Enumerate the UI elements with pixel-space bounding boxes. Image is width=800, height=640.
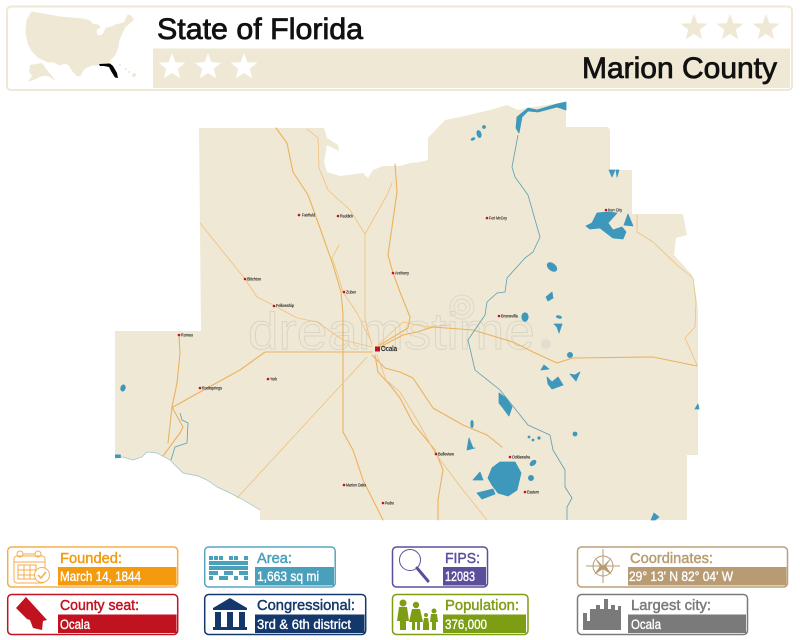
panel: Founded: Founded: bbox=[60, 550, 122, 567]
coastline edge bbox=[115, 452, 260, 510]
place markers and names: Bronsville bbox=[501, 314, 518, 318]
panel: County seat bbox=[8, 594, 178, 634]
title: State of Florida: State of Florida bbox=[157, 13, 363, 46]
place markers and names: Rocksprings bbox=[202, 386, 223, 390]
place markers and names: Kerr City bbox=[608, 208, 623, 212]
panel: County seat: Ocala bbox=[60, 617, 90, 632]
panel: Population bbox=[392, 594, 528, 634]
panel: Coordinates: 29° 13' N 82° 04' W bbox=[629, 569, 733, 584]
panel: Population: 376,000 bbox=[445, 617, 487, 632]
panel: Largest city: Ocala bbox=[631, 617, 661, 632]
place markers and names: Marion Oaks bbox=[346, 482, 367, 488]
panel: Congressional: Congressional: bbox=[257, 597, 355, 614]
map: Marion County bbox=[115, 102, 699, 520]
place markers and names: Fairfield bbox=[302, 212, 315, 218]
place markers and names: Fort McCoy bbox=[489, 216, 508, 220]
icon: district shape bbox=[16, 597, 47, 630]
icon: cream stars bbox=[681, 14, 779, 39]
watermark: dreamstime bbox=[248, 303, 535, 361]
place markers and names: Reddick bbox=[340, 214, 354, 218]
panel: FIPS: 12083 bbox=[445, 569, 475, 584]
panel: header banner bbox=[7, 6, 792, 90]
icon: white stars bbox=[159, 53, 257, 78]
place markers and names: Blitchton bbox=[247, 276, 261, 282]
icon: USA locator map bbox=[26, 12, 136, 82]
place markers and names: York bbox=[270, 376, 278, 382]
icon: city skyline bbox=[583, 599, 621, 630]
place markers and names: Pedro bbox=[385, 500, 394, 506]
panel: Area bbox=[205, 547, 335, 587]
place markers and names: Romeo bbox=[181, 332, 193, 338]
place markers and names: Ocklawaha bbox=[512, 454, 530, 460]
panel: Congressional: 3rd & 6th district bbox=[257, 617, 351, 632]
county land shape bbox=[115, 102, 698, 520]
panel: Largest city bbox=[578, 594, 748, 634]
place markers and names: Fellowship bbox=[276, 303, 294, 308]
panel: Area: Area: bbox=[257, 550, 292, 567]
panel: Founded: March 14, 1844 bbox=[60, 569, 141, 584]
panel: Population: Population: bbox=[445, 597, 519, 614]
panel: FIPS: FIPS: bbox=[445, 550, 480, 567]
county seat marker: Ocala: Ocala bbox=[381, 346, 397, 353]
panel: Congressional bbox=[205, 594, 366, 634]
place markers and names: Anthony bbox=[395, 270, 410, 276]
icon: government building bbox=[213, 598, 247, 630]
panel: Founded bbox=[8, 547, 178, 587]
panel: Coordinates bbox=[578, 547, 788, 587]
panel: Largest city: Largest city: bbox=[631, 597, 711, 614]
icon: family bbox=[397, 600, 438, 630]
panel: Area: 1,663 sq mi bbox=[257, 569, 319, 584]
place markers and names bbox=[178, 208, 623, 506]
icon: area grid bbox=[209, 556, 248, 580]
icon: magnifier bbox=[400, 550, 428, 581]
roads bbox=[163, 128, 697, 520]
title: Marion County: Marion County bbox=[582, 52, 777, 85]
place markers and names: Belleview bbox=[438, 452, 455, 456]
icon: compass rose bbox=[586, 549, 620, 583]
header band bbox=[153, 48, 790, 88]
icon: calendar bbox=[14, 551, 50, 583]
place markers and names: Eastern bbox=[527, 490, 539, 494]
place markers and names: Zuber bbox=[346, 290, 356, 294]
panel: Coordinates: Coordinates: bbox=[630, 550, 713, 567]
panel: County seat: County seat: bbox=[60, 597, 139, 614]
county seat marker: Ocala bbox=[375, 346, 397, 353]
panel: FIPS bbox=[392, 547, 488, 587]
rivers and lakes bbox=[115, 102, 699, 520]
